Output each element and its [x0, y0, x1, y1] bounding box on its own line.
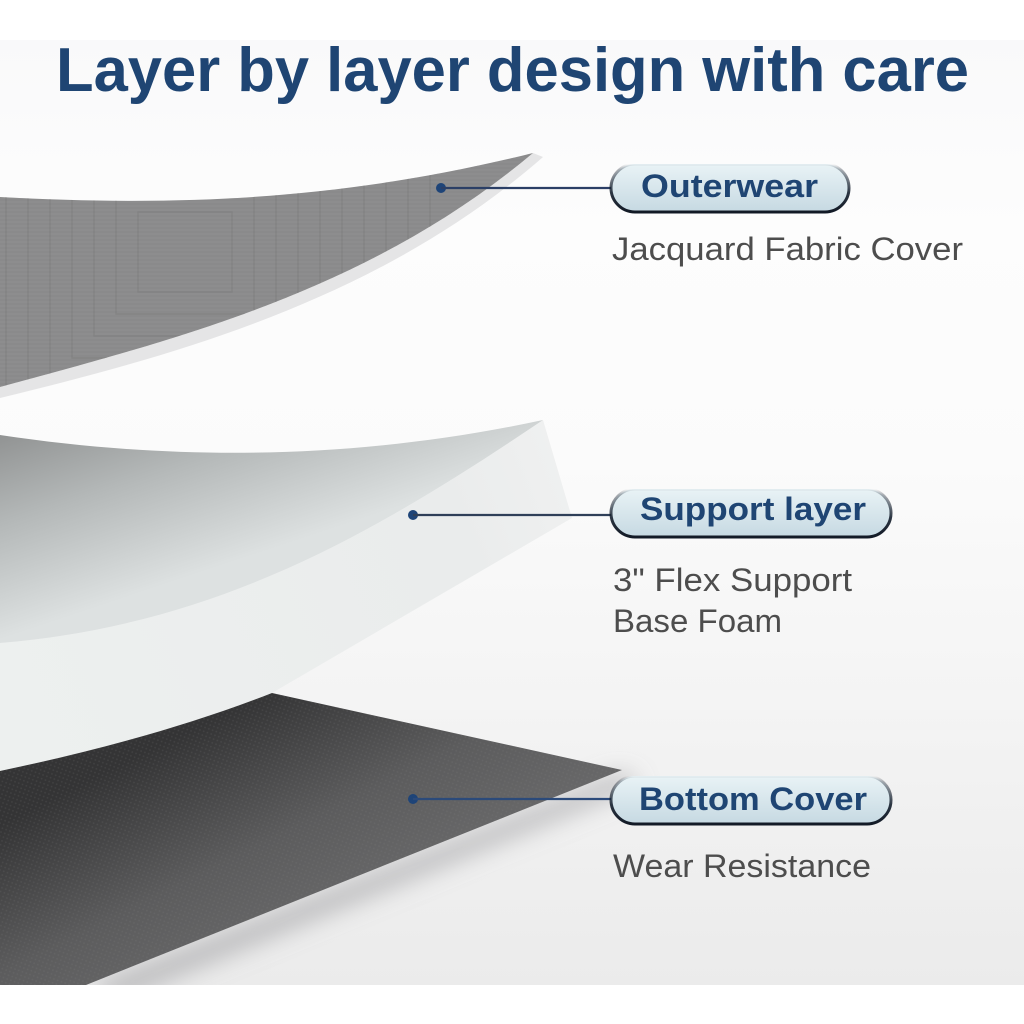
connector: outerwear: [436, 183, 612, 193]
connector: bottom cover: [408, 794, 612, 804]
description: bottom cover: Wear Resistance: [613, 848, 871, 884]
label: bottom cover: [611, 776, 891, 824]
label: outerwear: Outerwear: [641, 168, 818, 204]
description: outerwear: Jacquard Fabric Cover: [612, 231, 963, 267]
bottom cover shadow: [86, 772, 640, 1000]
description: support layer: Base Foam: [613, 603, 782, 639]
label: bottom cover: Bottom Cover: [639, 781, 867, 817]
label: outerwear: [611, 164, 849, 212]
label: support layer: [611, 489, 891, 537]
title: Layer by layer design with care: [56, 36, 969, 105]
support foam layer: [0, 420, 572, 772]
bottom cover layer: [0, 693, 622, 985]
label: support layer: Support layer: [640, 491, 866, 527]
description: support layer: 3" Flex Support: [613, 562, 852, 598]
outerwear fabric layer: [0, 153, 543, 398]
connector: support layer: [408, 510, 612, 520]
description: support layer: [613, 562, 852, 639]
